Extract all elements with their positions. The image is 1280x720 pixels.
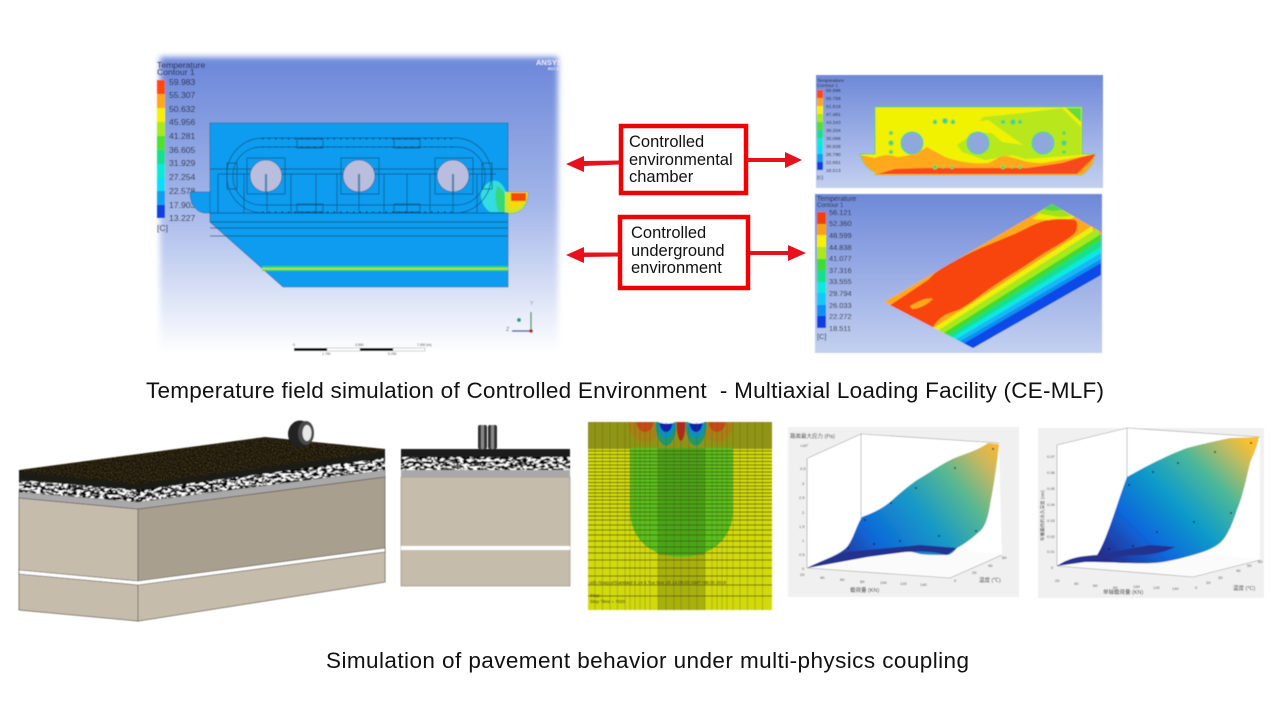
front flap: [807, 545, 957, 568]
legend labels: [C]: [157, 223, 168, 233]
3D surface chart: max stress: [788, 427, 1019, 597]
asphalt layer: [401, 449, 570, 457]
surface: [807, 443, 999, 568]
legend labels: 44.838: [829, 243, 852, 252]
callout: controlled underground environment: [620, 217, 748, 288]
callout: controlled environmental chamber: environmental: [629, 151, 733, 169]
tyre: [288, 420, 314, 448]
callout: controlled underground environment: underground: [631, 242, 725, 260]
axis labels: 60: [1002, 555, 1007, 560]
legend labels: [817, 78, 844, 181]
white interlayer: [401, 546, 570, 550]
ANSYS logo: ANSYS: [536, 58, 562, 67]
top right corner: [1066, 108, 1081, 122]
legend labels: Temperature: [817, 196, 856, 203]
legend labels: 17.903: [169, 200, 196, 210]
legend labels: 36.605: [169, 145, 196, 155]
legend labels: 35.066: [826, 136, 841, 142]
top contour band: [588, 421, 772, 450]
axis labels: 80: [860, 579, 865, 584]
chart titles: 路面最大应力 (Pa): [790, 432, 835, 440]
fixtures: [889, 118, 1067, 169]
finite element stress plot: [587, 421, 773, 611]
cooler zone: [957, 108, 1081, 160]
axis labels: 0.06: [1047, 470, 1056, 475]
chart background: [1038, 428, 1264, 598]
axis labels: 80: [1113, 585, 1118, 590]
legend labels: 27.254: [169, 172, 196, 182]
legend labels: 30.928: [826, 144, 841, 150]
scale bar: 3.500: [355, 343, 364, 347]
hottest zone: [878, 154, 1095, 174]
legend labels: 22.272: [829, 312, 852, 321]
lower central band: [658, 540, 705, 610]
legend labels: Contour 1: [157, 67, 195, 77]
chart titles: 载荷量 (KN): [850, 586, 880, 594]
green stress bulb: [630, 448, 733, 557]
axis labels: 100: [1133, 584, 1140, 589]
axis labels: 2: [802, 510, 805, 515]
scale bar: 1.750: [322, 352, 331, 356]
scale bar: 0: [293, 343, 295, 347]
model annotation: .odb Abaqus/Standard 6.14-5 Tue Nov 26 14:05:03 GMT+08:00 2019: [588, 580, 726, 585]
warm zone: [861, 147, 1095, 175]
axis labels: 40: [1074, 581, 1079, 586]
legend labels: 48.599: [829, 231, 852, 240]
axis labels: 60: [840, 577, 845, 582]
background: [816, 75, 1103, 188]
axis labels: 0.04: [1047, 502, 1056, 507]
panel: chamber contour: [816, 75, 1103, 188]
pavement block 3D model: [19, 420, 385, 621]
axis labels: 0: [802, 566, 805, 571]
legend labels: 45.956: [169, 117, 196, 127]
axes walls: [1057, 428, 1260, 577]
axis labels: [1047, 454, 1263, 591]
legend labels: Contour 1: [817, 203, 844, 209]
chart background: [788, 427, 1019, 597]
axis labels: 3.5: [800, 466, 806, 471]
axis labels: 2.5: [799, 495, 805, 500]
legend labels: 59.983: [169, 77, 196, 87]
panel: underground contour: [814, 193, 1103, 354]
legend labels: 31.929: [169, 158, 196, 168]
axis triad: Y: [530, 301, 534, 307]
legend labels: 41.281: [169, 131, 196, 141]
axis labels: 40: [1236, 568, 1241, 573]
axis labels: 0.02: [1047, 534, 1056, 539]
ANSYS logo: R17.1: [548, 66, 559, 71]
model annotation: Step:: [590, 593, 601, 598]
field background: [588, 422, 772, 610]
chart titles: 温度 (℃): [979, 576, 1001, 584]
legend labels: 18.513: [826, 168, 841, 174]
arrow: chamber to right panel: [747, 152, 802, 168]
mesh lines: [588, 451, 772, 596]
axis labels: 60: [1093, 583, 1098, 588]
legend labels: 56.121: [829, 208, 852, 217]
callout: controlled environmental chamber: Controlled: [629, 133, 704, 151]
arrow: underground to main panel: [566, 247, 619, 263]
axis labels: 120: [900, 581, 907, 586]
legend labels: 50.632: [169, 104, 196, 114]
axes walls: [807, 434, 1002, 578]
axis labels: 30: [1218, 575, 1223, 580]
axis labels: 0: [1195, 585, 1198, 590]
legend labels: Temperature: [817, 78, 844, 84]
chart titles: 温度 (°C): [1233, 584, 1256, 592]
legend labels: [C]: [817, 175, 823, 181]
side faces: [19, 498, 138, 621]
data points: [847, 448, 994, 549]
data points: [1108, 442, 1252, 550]
axis labels: 20: [972, 570, 977, 575]
legend labels: 55.758: [826, 96, 841, 102]
cylinders: [901, 132, 1054, 154]
legend labels: 33.555: [829, 277, 852, 286]
callout: controlled environmental chamber: chamber: [629, 168, 694, 186]
panel: main temperature contour: [157, 57, 562, 356]
legend labels: 43.343: [826, 120, 841, 126]
legend labels: 29.794: [829, 289, 852, 298]
legend labels: Contour 1: [817, 83, 838, 89]
section contour: [860, 107, 1095, 175]
surface: [1057, 437, 1259, 566]
callout: controlled underground environment: environment: [631, 259, 722, 277]
axis labels: 60: [1258, 559, 1263, 564]
chart titles: 车辙最终的永久深度 (cm): [1039, 490, 1046, 541]
track outlines: [210, 138, 508, 236]
grey layer: [401, 470, 570, 477]
axis triad: [506, 301, 534, 333]
model annotation: [588, 580, 726, 604]
callout: controlled underground environment: Controlled: [631, 224, 706, 242]
axis labels: 0.01: [1047, 549, 1056, 554]
legend colour bar: [817, 212, 826, 328]
chart titles: [790, 432, 1001, 594]
legend labels: 47.481: [826, 112, 841, 118]
legend labels: [157, 60, 205, 233]
chart titles: ×10⁷: [800, 443, 809, 448]
axis labels: 40: [988, 563, 993, 568]
axis labels: 100: [880, 580, 887, 585]
axis labels: 20: [800, 572, 805, 577]
axis labels: 0.5: [799, 552, 805, 557]
axis triad: Z: [506, 327, 510, 333]
tyres: [478, 425, 497, 449]
axis labels: 20: [1055, 578, 1060, 583]
axis labels: 3: [802, 481, 805, 486]
axis labels: 0.05: [1047, 486, 1056, 491]
aggregate layer: [19, 457, 385, 502]
axis labels: 50: [1247, 563, 1252, 568]
legend labels: 51.619: [826, 104, 841, 110]
pavement contour: [884, 204, 1102, 348]
axis labels: 40: [820, 575, 825, 580]
arrow: chamber to main panel: [566, 156, 619, 172]
scale bar: [293, 343, 432, 356]
grey layer: [19, 470, 385, 509]
legend labels: 22.651: [826, 160, 841, 166]
legend labels: Temperature: [157, 60, 205, 70]
yellow finger: [968, 120, 1023, 145]
legend colour bar: [157, 80, 165, 218]
pavement section model: [401, 425, 570, 586]
legend labels: 55.307: [169, 90, 196, 100]
axis labels: 20: [1206, 580, 1211, 585]
white interlayer: [19, 548, 385, 585]
caption: pavement behaviour: Simulation of pavement behavior under multi-physics coupling: [326, 648, 969, 673]
heated band: [262, 266, 508, 271]
legend labels: 26.790: [826, 152, 841, 158]
axis labels: [799, 466, 1007, 587]
legend labels: 37.316: [829, 266, 852, 275]
axis labels: 0: [1051, 565, 1054, 570]
facility section: [190, 123, 528, 287]
axis labels: 1: [802, 538, 805, 543]
hot spot: [481, 181, 528, 213]
legend labels: 39.204: [826, 128, 841, 134]
legend labels: 22.578: [169, 186, 196, 196]
legend labels: 52.360: [829, 219, 852, 228]
track bolts: [262, 139, 456, 212]
legend labels: 59.896: [826, 88, 841, 94]
arrow: underground to right panel: [750, 245, 806, 261]
aggregate layer: [401, 457, 570, 470]
asphalt surface: [19, 437, 385, 487]
3D surface chart: permanent deformation: [1038, 428, 1264, 598]
axis labels: 0.03: [1047, 518, 1056, 523]
background: [815, 194, 1102, 353]
legend labels: [C]: [817, 332, 826, 341]
front flap: [1057, 545, 1175, 566]
legend labels: [817, 196, 856, 341]
axis labels: 0.07: [1047, 454, 1056, 459]
asphalt edge: [19, 452, 385, 490]
legend labels: 26.033: [829, 301, 852, 310]
chart titles: 单轴载荷量 (KN): [1103, 588, 1144, 596]
caption: temperature field: Temperature field simulation of Controlled Environment - Multiaxial Loading Facility (CE-MLF): [146, 378, 1104, 403]
legend labels: 18.511: [829, 324, 851, 333]
scale bar: 5.250: [388, 352, 397, 356]
ANSYS logo: [536, 58, 562, 71]
axis labels: 1.5: [799, 524, 805, 529]
legend labels: 13.227: [169, 213, 196, 223]
cylinders: [250, 160, 469, 192]
axis labels: 140: [920, 582, 927, 587]
panel background: [160, 57, 558, 353]
chart titles: [1039, 490, 1256, 596]
axis labels: 120: [1153, 585, 1160, 590]
scale bar: 7.000 (m): [417, 343, 432, 347]
legend labels: 41.077: [829, 254, 852, 263]
central dark band: [658, 448, 705, 555]
axis labels: 0: [954, 578, 957, 583]
model annotation: Step Time = 7020: [590, 599, 626, 604]
axis labels: 140: [1172, 586, 1179, 591]
legend colour bar: [817, 90, 823, 170]
subgrade layers: [401, 477, 570, 586]
callout: controlled environmental chamber: [621, 126, 746, 193]
